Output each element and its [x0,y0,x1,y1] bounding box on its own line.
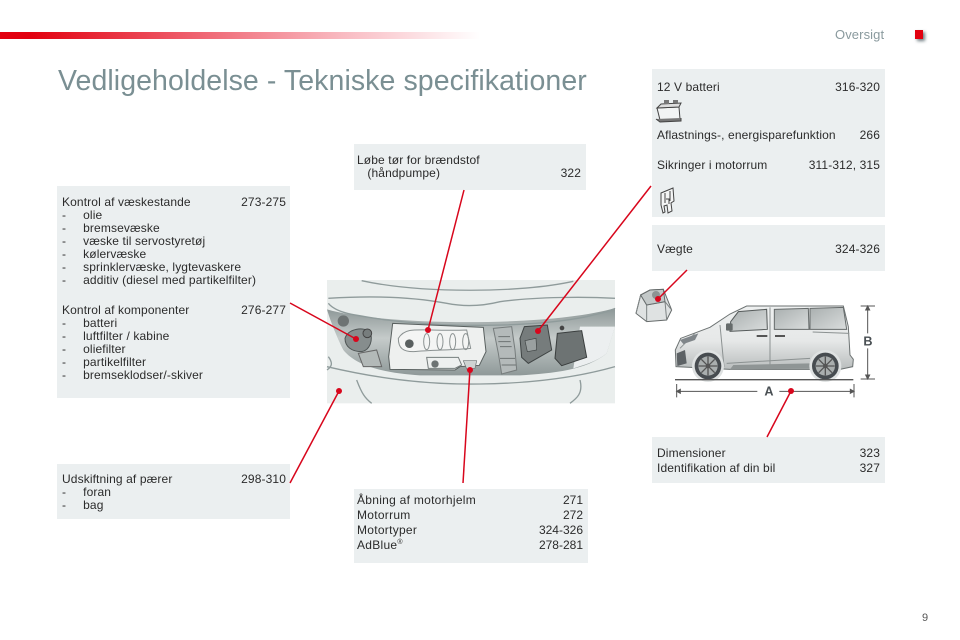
illustration: van with dimensions [674,305,875,398]
page number: 12 V battery: 316-320 [835,80,880,94]
icon: battery [656,100,682,122]
panel: bulbs [57,464,290,519]
page number: bulb replacement: 298-310 [241,472,286,486]
header gradient bar [0,32,480,39]
panel: weights [652,225,885,271]
text: bulb replacement: - bag [62,498,104,512]
illustration: engine bay [326,280,616,404]
text: component checks: Kontrol af komponenter [62,303,189,317]
panel: battery and fuses [652,69,885,217]
text: engine topics: Åbning af motorhjelm [357,493,476,507]
page numbers: engine topics: 324-326 [539,523,583,537]
text: 12 V battery: 12 V batteri [657,80,720,94]
text: engine topics: AdBlue® [357,538,403,552]
text: engine topics: Motortyper [357,523,417,537]
text: fluid level checks: Kontrol af væskestande [62,195,191,209]
illustration: van with dimensions: B [863,334,873,348]
section label: Oversigt: Oversigt [835,27,884,42]
text: weights: Vægte [657,242,693,256]
page numbers: dimensions and identification: 323 [860,446,880,460]
text: dimensions and identification: Identifikation af din bil [657,461,775,475]
text: fluid level checks [62,195,256,287]
illustration: jack base [636,288,672,322]
page number: load shedding: 266 [860,128,880,142]
page numbers: dimensions and identification: 327 [860,461,880,475]
text: fluid level checks: - væske til servostyretøj [62,234,205,248]
text: fuel pump heading [357,153,480,180]
page numbers: engine topics: 272 [563,508,583,522]
text: fluid level checks: - kølervæske [62,247,146,261]
page number: engine fuses: 311-312, 315 [809,158,880,172]
panel: fluid and component checks [57,186,290,398]
page number: 9 [922,612,928,624]
panel: dimensions [652,437,885,483]
page numbers: dimensions and identification [860,446,880,475]
text: fluid level checks: - sprinklervæske, lygtevaskere [62,260,241,274]
page numbers: engine topics [539,493,583,552]
page numbers: engine topics: 278-281 [539,538,583,552]
section marker square [915,30,923,39]
text: fuel pump heading: (håndpumpe) [367,166,440,180]
text: fluid level checks: - additiv (diesel med partikelfilter) [62,273,256,287]
text: component checks: - batteri [62,316,117,330]
text: component checks: - partikelfilter [62,355,146,369]
page number: fluid level checks: 273-275 [241,195,286,209]
text: component checks: - oliefilter [62,342,126,356]
page numbers: engine topics: 271 [563,493,583,507]
text: component checks [62,303,203,382]
panel: bonnet and engine [354,489,588,563]
text: bulb replacement: Udskiftning af pærer [62,472,172,486]
text: engine fuses: Sikringer i motorrum [657,158,767,172]
illustration: van with dimensions: A [764,384,774,398]
text: fuel pump heading: Løbe tør for brændstof [357,153,480,167]
icon: fuse [660,187,674,214]
text: fluid level checks: - olie [62,208,102,222]
text: bulb replacement: - foran [62,485,111,499]
page number: component checks: 276-277 [241,303,286,317]
text: dimensions and identification: Dimensioner [657,446,726,460]
text: component checks: - luftfilter / kabine [62,329,169,343]
title: Vedligeholdelse - Tekniske specifikationer [58,65,587,97]
text: dimensions and identification [657,446,775,475]
page number: fuel pump: 322 [561,166,581,180]
text: load shedding: Aflastnings-, energisparefunktion [657,128,836,142]
text: bulb replacement [62,472,172,512]
text: engine topics: Motorrum [357,508,411,522]
panel: fuel pump [354,144,586,190]
text: component checks: - bremseklodser/-skiver [62,368,203,382]
page number: weights: 324-326 [835,242,880,256]
text: fluid level checks: - bremsevæske [62,221,160,235]
text: engine topics [357,493,476,552]
